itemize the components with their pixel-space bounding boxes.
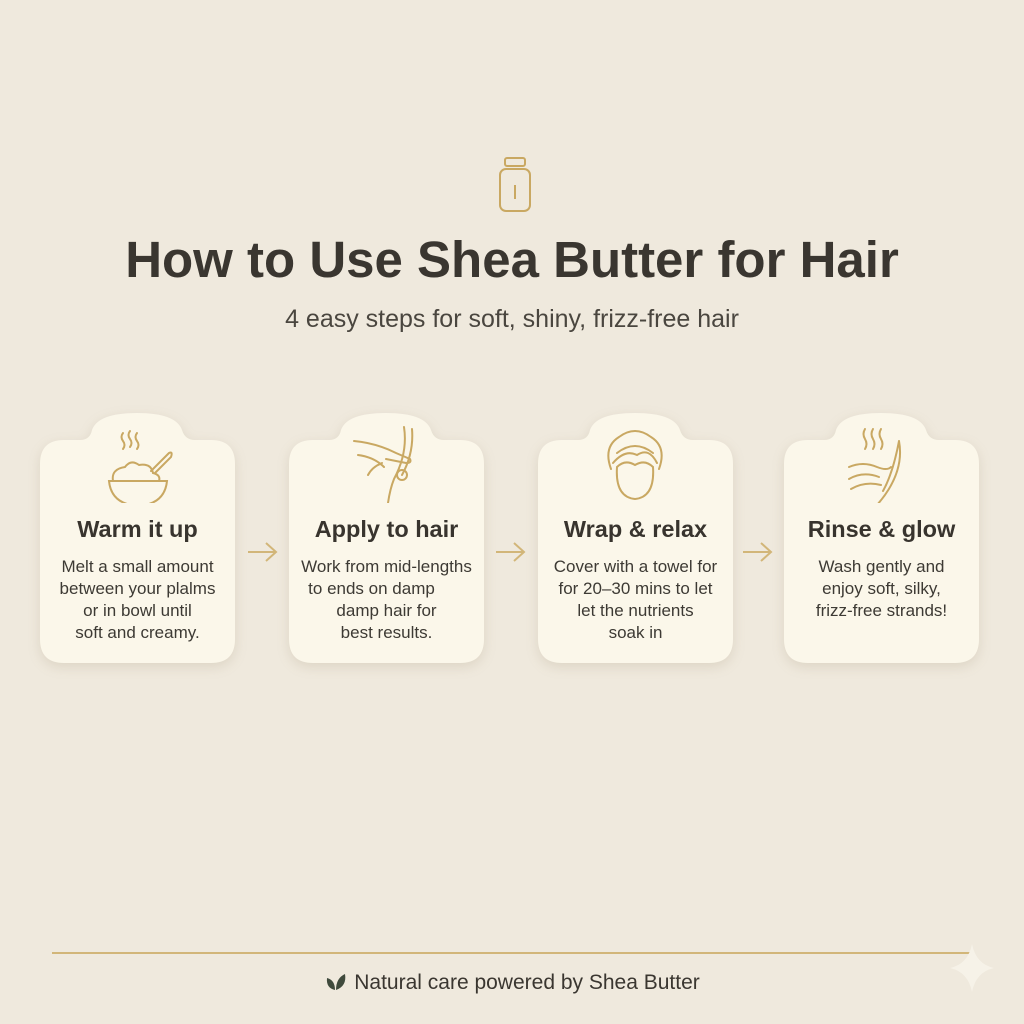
arrow	[248, 542, 278, 562]
text	[301, 557, 472, 642]
arrow	[496, 542, 526, 562]
icon: glowing hair	[848, 428, 902, 503]
text: between your plalms	[60, 579, 215, 598]
text: or in bowl until	[83, 601, 192, 620]
heading: Apply to hair	[315, 516, 458, 542]
icon: bowl	[108, 430, 173, 503]
text	[60, 557, 215, 642]
icon: sparkle	[952, 946, 992, 990]
heading: Wrap & relax	[564, 516, 707, 542]
icon: hand on hair	[353, 426, 414, 503]
text: enjoy soft, silky,	[822, 579, 941, 598]
heading: Warm it up	[77, 516, 198, 542]
text: soft and creamy.	[75, 623, 200, 642]
panel: step 4	[782, 413, 982, 670]
text: soak in	[609, 623, 662, 642]
panel: step 1	[38, 413, 238, 670]
text: frizz-free strands!	[816, 601, 947, 620]
text: Melt a small amount	[61, 557, 214, 576]
footer: Natural care powered by Shea Butter	[354, 971, 700, 994]
icon: jar	[499, 157, 531, 212]
heading: Rinse & glow	[808, 516, 955, 542]
text: Wash gently and	[818, 557, 944, 576]
panel: step 2	[286, 413, 486, 670]
panel: step 3	[536, 413, 736, 670]
text: let the nutrients	[577, 601, 694, 620]
text: damp hair for	[336, 601, 437, 620]
arrow	[743, 542, 772, 562]
title: How to Use Shea Butter for Hair	[125, 231, 899, 288]
text: Work from mid-lengths	[301, 557, 472, 576]
text: for 20–30 mins to let	[558, 579, 713, 598]
subtitle: 4 easy steps for soft, shiny, frizz-free hair	[285, 305, 739, 333]
footer line	[52, 952, 970, 954]
text: best results.	[341, 623, 432, 642]
text: to ends on damp	[308, 579, 435, 598]
text	[554, 557, 717, 642]
text	[816, 557, 947, 620]
text: Cover with a towel for	[554, 557, 717, 576]
icon: towel head	[607, 430, 663, 500]
